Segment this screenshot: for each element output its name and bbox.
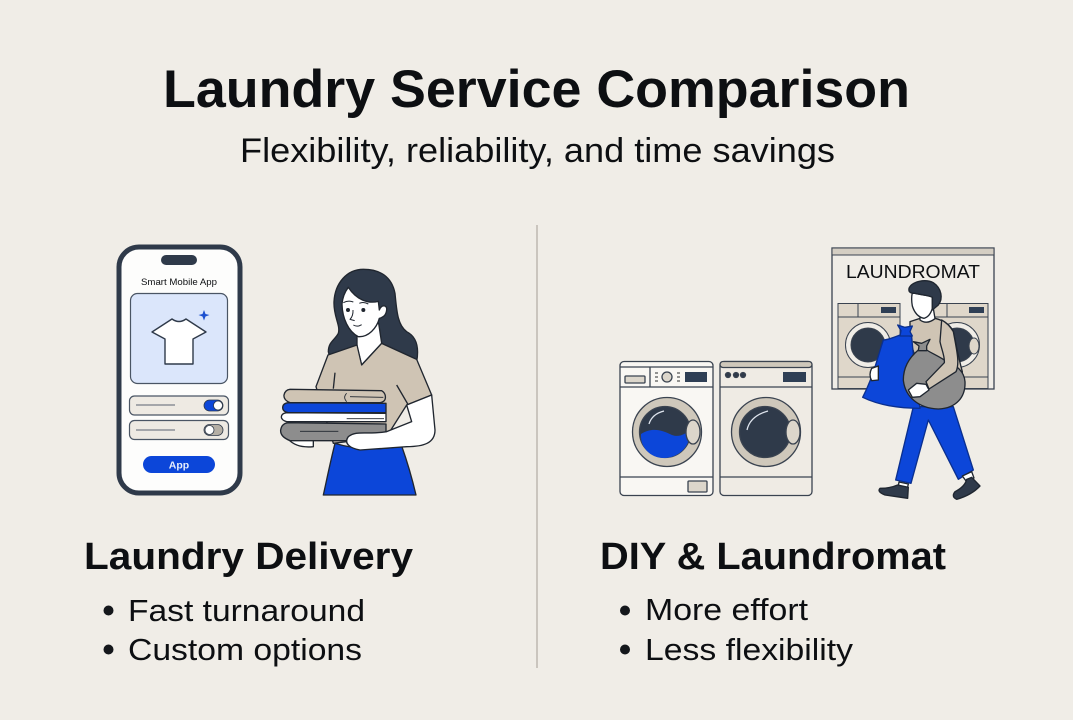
- laundry bag: blue: [863, 325, 920, 408]
- toggle row off: [130, 420, 228, 440]
- illustration: laundromat storefront: [832, 248, 994, 389]
- storefront sign: LAUNDROMAT: [846, 262, 980, 282]
- icon: smartphone app: [119, 247, 240, 493]
- toggle row on: [130, 396, 228, 415]
- man's arm: [926, 320, 958, 389]
- icon: washing machine with water: [620, 362, 713, 496]
- bullet list: Custom options: [128, 632, 362, 667]
- laundry bag: grey: [903, 339, 965, 409]
- illustration: woman holding folded laundry: [281, 269, 435, 495]
- heading: DIY & Laundromat: [600, 536, 946, 578]
- icon: t-shirt: [152, 319, 206, 364]
- bullet list: [620, 592, 854, 667]
- bullet list: Less flexibility: [645, 632, 854, 667]
- icon: smartphone app: App: [169, 460, 189, 472]
- panel: DIY and laundromat: [600, 248, 994, 667]
- illustration: man carrying laundry bags: [863, 281, 980, 499]
- panel: laundry delivery: [84, 247, 435, 667]
- title: Laundry Service Comparison: [163, 60, 910, 119]
- app button: [143, 456, 215, 473]
- heading: Laundry Delivery: [84, 536, 413, 578]
- app image panel: [130, 294, 228, 384]
- bullet list: [104, 593, 365, 667]
- phone label: Smart Mobile App: [141, 277, 217, 288]
- icon: washing machine: [720, 362, 812, 496]
- towel stack: [281, 389, 386, 441]
- bullet list: Fast turnaround: [128, 593, 365, 628]
- bullet list: More effort: [645, 592, 808, 627]
- icon: sparkle: [198, 310, 210, 320]
- subtitle: Flexibility, reliability, and time savings: [240, 132, 835, 170]
